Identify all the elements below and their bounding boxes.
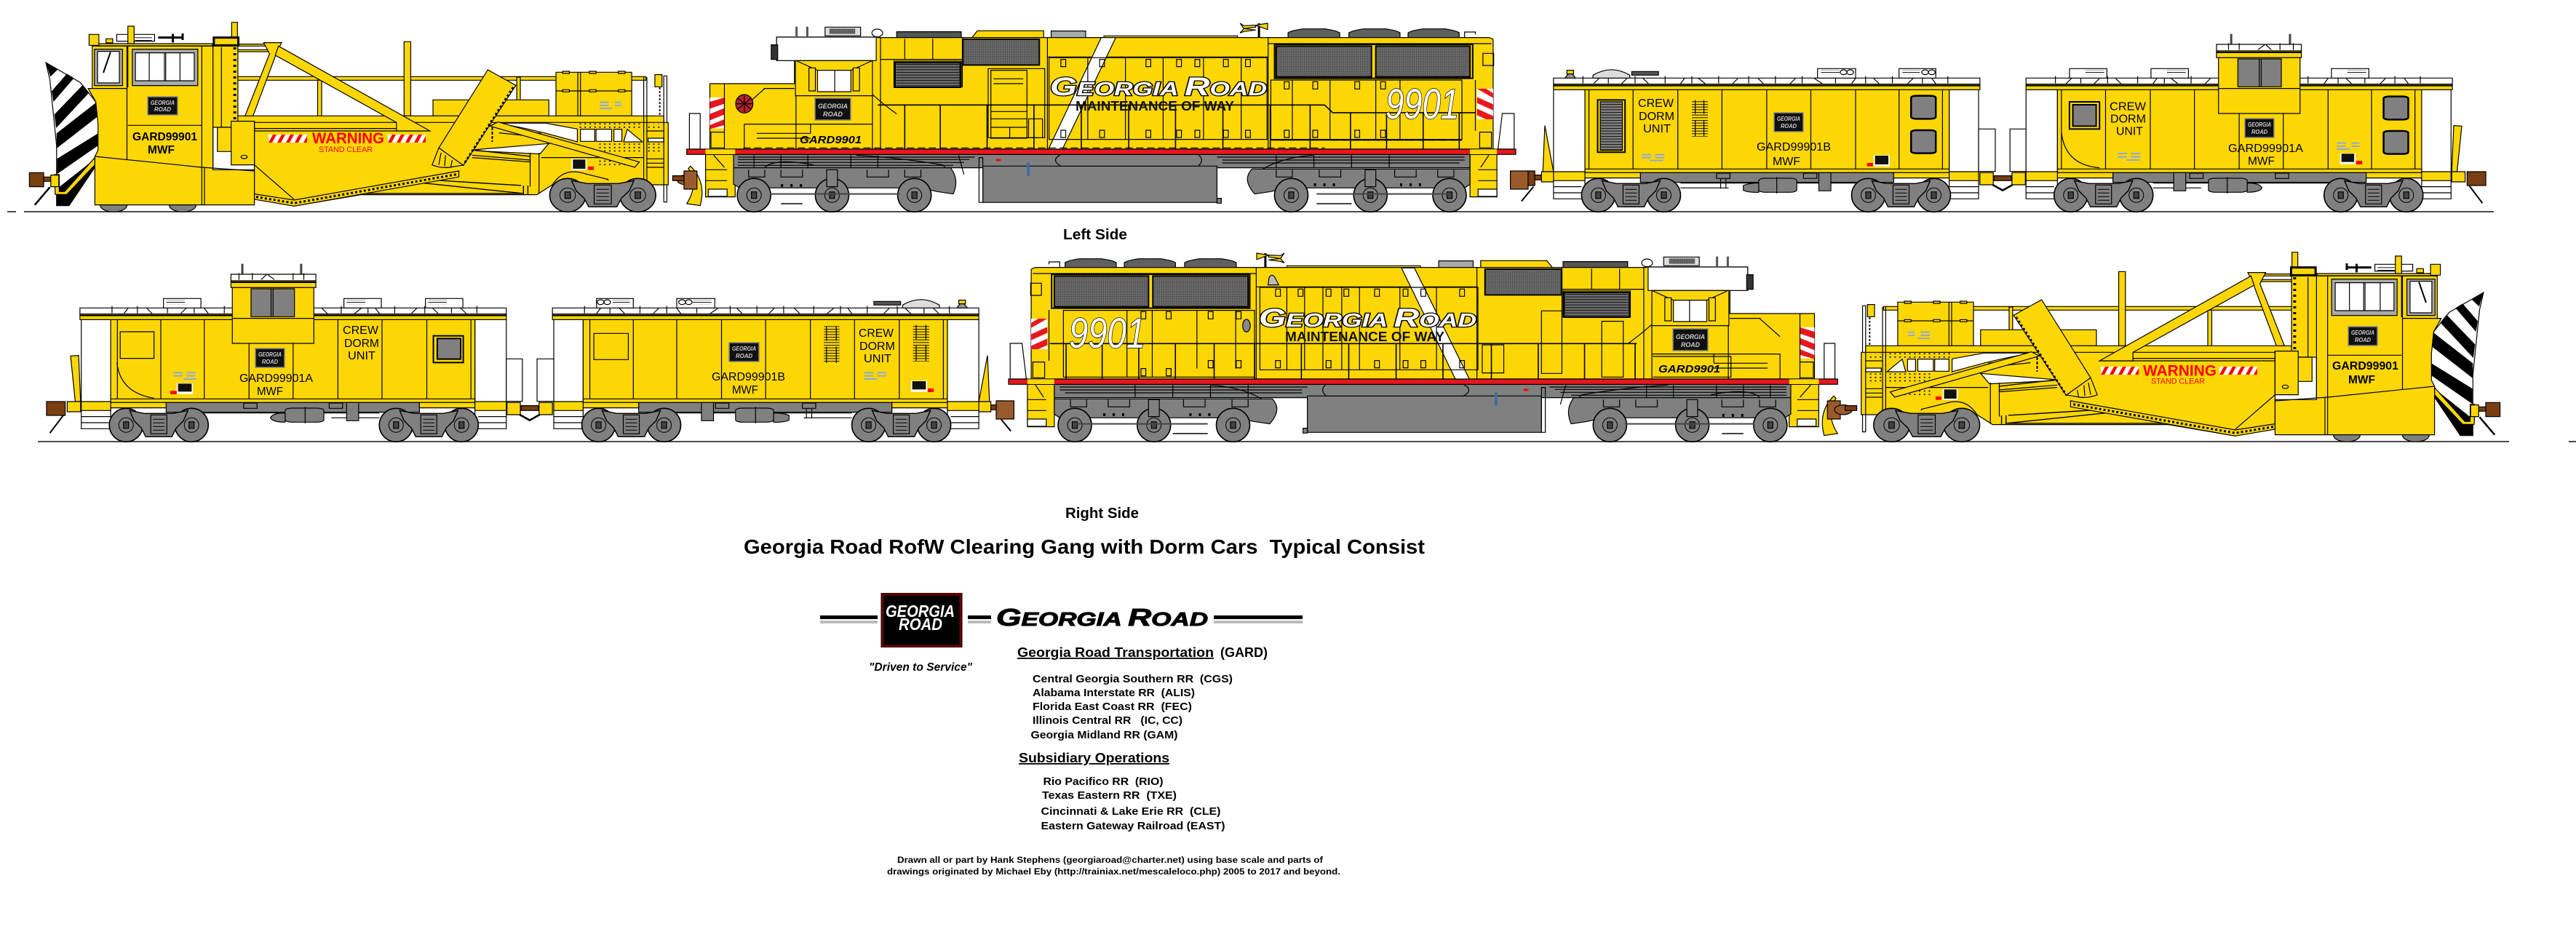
hood and cab body — [710, 37, 1493, 149]
hood doors — [1049, 57, 1462, 140]
door badge — [1867, 155, 1890, 167]
upper rails and railings — [213, 41, 662, 116]
crew dorm unit — [343, 324, 379, 362]
caboose dorm car A: right side — [47, 264, 506, 442]
herald — [148, 97, 178, 115]
number board — [1243, 319, 1250, 332]
cab wheels — [100, 199, 127, 212]
wing plow with hazard stripes — [46, 63, 99, 206]
parent company heading: Georgia Road Transportation — [1017, 645, 1214, 660]
herald: GEORGIA — [2351, 330, 2374, 336]
end railings — [689, 113, 1514, 149]
railroad list: Georgia Midland RR (GAM) — [1030, 729, 1177, 741]
credits — [887, 855, 1340, 877]
cab roof — [776, 37, 876, 60]
end door outline — [594, 333, 628, 359]
speed lines — [820, 615, 1303, 619]
support column — [213, 38, 255, 165]
herald: ROAD — [2355, 337, 2371, 343]
cab window — [797, 61, 871, 92]
herald — [2245, 119, 2274, 137]
dashed walkway lines — [743, 140, 1462, 148]
rear coupler — [2452, 126, 2486, 203]
logo square: GEORGIA — [886, 602, 955, 621]
left side caption: Left Side — [1063, 227, 1127, 243]
herald — [729, 343, 759, 362]
cab front window — [95, 49, 122, 86]
reporting mark: GARD99901A — [239, 372, 314, 385]
logo square: ROAD — [899, 615, 942, 634]
crew dorm unit — [1638, 97, 1674, 135]
mwf mark: MWF — [2348, 374, 2375, 386]
reporting mark: GARD99901B — [712, 371, 785, 383]
side bracket — [490, 122, 640, 167]
louvers — [1692, 100, 1708, 137]
railroad list: Alabama Interstate RR (ALIS) — [1033, 687, 1195, 699]
white hood stripe — [1049, 38, 1116, 149]
herald — [1673, 329, 1708, 351]
warning text: WARNING — [2143, 362, 2217, 380]
vent grille — [1598, 100, 1625, 152]
railroad list — [1030, 673, 1233, 741]
railroad list: Illinois Central RR (IC, CC) — [1033, 714, 1182, 727]
pilot plow — [687, 166, 702, 206]
reporting mark: GARD99901A — [2228, 143, 2304, 155]
crew dorm unit: CREW — [1638, 97, 1674, 110]
herald — [815, 98, 851, 120]
wheels — [737, 170, 1466, 212]
underframe — [1554, 172, 1979, 193]
railroad list: Central Georgia Southern RR (CGS) — [1033, 673, 1233, 685]
reporting mark — [239, 372, 314, 398]
car ends — [1554, 89, 1979, 199]
subsidiary list: Eastern Gateway Railroad (EAST) — [1041, 820, 1225, 832]
reservoir and brake gear — [2174, 172, 2289, 194]
door badge — [2340, 153, 2362, 164]
jordan spreader: right side — [1834, 252, 2500, 442]
trucks — [1581, 178, 1950, 212]
lower ramp with bolts — [255, 171, 459, 206]
herald: ROAD — [2251, 129, 2267, 135]
handrail and stanchions — [1050, 343, 1637, 380]
herald: ROAD — [1781, 123, 1797, 129]
warning stripes — [269, 135, 426, 143]
crew dorm unit: UNIT — [2116, 125, 2144, 138]
crew dorm unit: DORM — [2110, 113, 2146, 125]
track rail: right side — [38, 441, 2576, 442]
subsidiary list: Texas Eastern RR (TXE) — [1042, 789, 1177, 802]
credits: drawings originated by Michael Eby (http://trainiax.net/mescaleloco.php) 2005 to 2017 and beyond. — [887, 866, 1340, 877]
wordmark: G EORGIA R OAD — [996, 604, 1208, 631]
title: Georgia Road RofW Clearing Gang with Dorm Cars Typical Consist — [744, 535, 1425, 558]
red and white end stripes — [710, 89, 1493, 129]
red walkway band — [687, 149, 1516, 154]
credits: Drawn all or part by Hank Stephens (georgiaroad@charter.net) using base scale and parts of — [897, 855, 1324, 865]
cupola — [2217, 34, 2302, 113]
crew dorm unit: UNIT — [348, 350, 376, 362]
handrail and stanchions — [878, 105, 1476, 149]
reporting mark — [712, 371, 785, 396]
door latches — [1061, 60, 1386, 137]
dorm car B: left side — [1522, 68, 2026, 212]
horn — [1240, 23, 1268, 38]
reporting mark: GARD9901 — [800, 134, 862, 146]
rounded windows — [2384, 97, 2409, 154]
radiator fans — [1288, 29, 1459, 38]
herald: ROAD — [154, 106, 171, 113]
road number: 9901 — [1386, 81, 1459, 128]
herald: GEORGIA — [151, 100, 175, 106]
herald: GEORGIA — [2248, 121, 2271, 128]
reporting mark: MWF — [732, 384, 758, 396]
stand clear text: STAND CLEAR — [319, 145, 373, 154]
mwf mark: MWF — [148, 144, 175, 156]
crew dorm unit: UNIT — [1643, 123, 1671, 135]
herald: GEORGIA — [818, 103, 848, 110]
herald — [1774, 113, 1803, 132]
crew dorm unit — [2110, 100, 2146, 138]
track rail: left side — [7, 211, 2494, 212]
maintenance of way: MAINTENANCE OF WAY — [1076, 99, 1234, 113]
door latches — [1141, 289, 1465, 376]
reporting mark: MWF — [1773, 156, 1800, 168]
crew dorm unit — [859, 327, 895, 365]
caboose left side details — [2062, 97, 2409, 168]
slogan: "Driven to Service" — [869, 661, 972, 674]
window — [434, 336, 464, 362]
dorm car B left side details — [1598, 96, 1936, 167]
herald: ROAD — [262, 359, 278, 365]
warning stripes — [2101, 367, 2257, 375]
railroad name: G EORGIA R OAD — [1259, 304, 1476, 332]
road number: 9901 — [1069, 310, 1145, 357]
subsidiary list — [1041, 775, 1225, 832]
rear coupler — [672, 175, 695, 185]
railroad name: G EORGIA R OAD — [1050, 73, 1267, 101]
spreader main body — [238, 116, 668, 206]
dynamic brake grille — [963, 39, 1039, 65]
subsidiary list: Rio Pacifico RR (RIO) — [1043, 775, 1163, 788]
locomotive: left side — [684, 23, 1528, 212]
wing bracing — [245, 43, 430, 131]
end door window — [2070, 102, 2099, 129]
cab roof equipment — [89, 23, 237, 46]
car couplers and end rails — [1522, 126, 2026, 202]
parent company heading: (GARD) — [1220, 645, 1268, 660]
reporting mark: GARD99901 — [2332, 360, 2398, 372]
logo banner — [820, 593, 1303, 647]
maintenance of way: MAINTENANCE OF WAY — [1285, 330, 1444, 344]
right side caption: Right Side — [1065, 506, 1139, 522]
rounded windows — [1911, 96, 1936, 153]
herald: ROAD — [823, 111, 843, 118]
logo square — [880, 593, 962, 647]
stand clear text: STAND CLEAR — [2151, 377, 2205, 386]
herald: GEORGIA — [732, 346, 756, 352]
roof vents — [2070, 68, 2369, 78]
door badge — [571, 159, 594, 170]
reporting mark — [1757, 141, 1831, 168]
reporting mark: GARD9901 — [1658, 363, 1720, 375]
jordan spreader: left side — [29, 23, 695, 212]
truck — [549, 178, 656, 212]
couplers — [684, 171, 1528, 189]
cab body — [88, 46, 255, 205]
roof — [1554, 76, 1980, 89]
railroad list: Florida East Coast RR (FEC) — [1033, 701, 1192, 713]
herald — [255, 348, 285, 367]
reporting mark: MWF — [2248, 156, 2275, 167]
crew dorm unit: DORM — [344, 338, 379, 350]
reporting mark: MWF — [257, 386, 283, 398]
reporting mark: GARD99901B — [1757, 141, 1831, 153]
caboose dorm car A: left side — [2026, 34, 2486, 212]
white hood stripe — [1402, 268, 1469, 379]
star emblem — [736, 95, 753, 113]
roof vents — [1818, 68, 1936, 78]
fuel tank — [979, 154, 1221, 203]
crew dorm unit: UNIT — [864, 353, 892, 365]
herald: ROAD — [1681, 341, 1700, 348]
roof equipment — [797, 27, 1238, 38]
coupler — [29, 158, 95, 205]
left side hood panels and markings — [736, 38, 1476, 149]
herald: GEORGIA — [1777, 116, 1800, 122]
dorm car B: right side — [506, 298, 1011, 442]
bell — [1268, 275, 1279, 285]
radiator grilles — [1275, 44, 1473, 79]
crew dorm unit: CREW — [859, 327, 894, 340]
car body — [1585, 89, 1949, 172]
end platforms — [706, 154, 1497, 197]
reporting mark — [2228, 143, 2304, 167]
herald: GEORGIA — [1676, 333, 1705, 340]
reservoir and brake gear — [1717, 172, 1831, 194]
crew dorm unit: CREW — [2110, 100, 2146, 113]
hydraulic cylinders — [361, 150, 530, 195]
herald — [2348, 327, 2377, 346]
hood outlines — [744, 38, 1492, 149]
herald: ROAD — [736, 353, 752, 359]
subsidiary heading: Subsidiary Operations — [1019, 751, 1169, 765]
herald: GEORGIA — [258, 351, 282, 358]
locomotive: right side — [996, 253, 1840, 442]
reporting mark: GARD99901 — [132, 131, 197, 143]
warning text: WARNING — [312, 130, 384, 147]
subsidiary list: Cincinnati & Lake Erie RR (CLE) — [1041, 805, 1221, 818]
engine air grille — [895, 63, 961, 87]
nose details — [711, 53, 1494, 149]
door badge — [911, 380, 934, 392]
cab side window — [132, 49, 198, 86]
end door outline — [120, 332, 154, 359]
louvers — [824, 325, 929, 363]
underframe — [734, 154, 1470, 175]
blade — [439, 70, 516, 165]
crew dorm unit: CREW — [343, 324, 378, 337]
truck frames — [734, 168, 1470, 194]
hood doors — [1063, 287, 1731, 377]
crew dorm unit: DORM — [1639, 111, 1674, 123]
door badge — [170, 383, 193, 394]
roof dome and beacon — [1565, 70, 1658, 78]
cab side door — [988, 68, 1045, 138]
crew dorm unit: DORM — [859, 340, 895, 353]
